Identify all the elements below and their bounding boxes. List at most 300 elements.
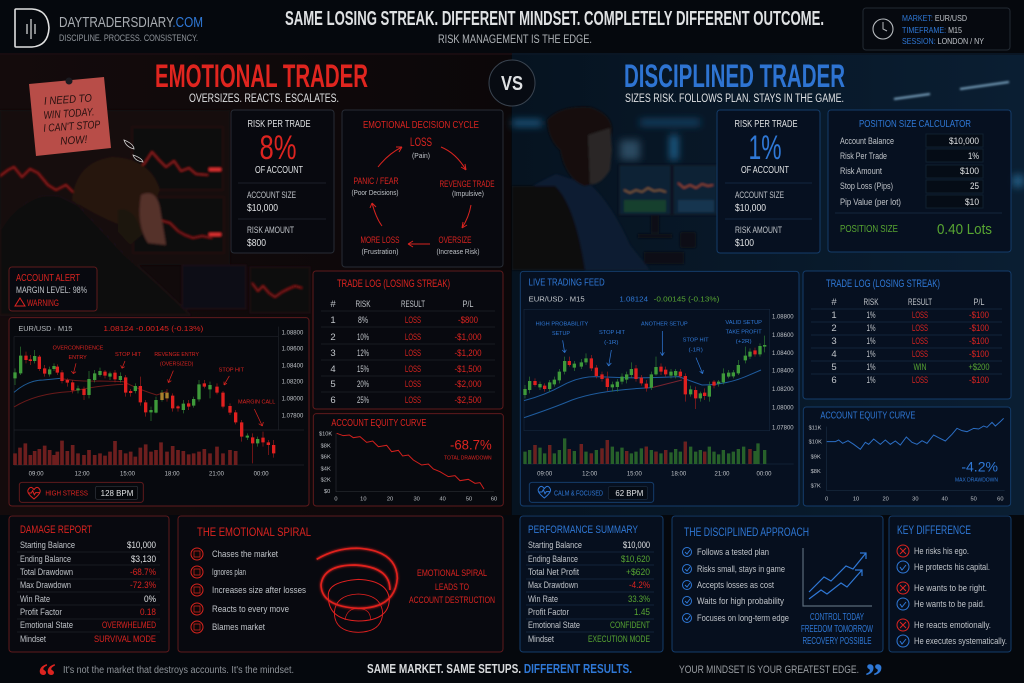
panel: the disciplined approach: Risks small, stays in game	[697, 564, 785, 575]
panel: equity curve disciplined: 20	[883, 496, 889, 502]
panel: trade log emotional: RESULT	[401, 299, 425, 310]
panel: the disciplined approach: Focuses on long-term edge	[697, 613, 789, 624]
panel: trade log disciplined: LOSS	[912, 323, 928, 334]
volume bars	[525, 438, 765, 464]
footer	[0, 655, 1024, 683]
panel: damage report: -72.3%	[130, 580, 156, 591]
panel: trade log emotional: -$2,000	[454, 379, 482, 390]
panel: trade log disciplined: LOSS	[912, 336, 928, 347]
panel: equity curve emotional: 10	[360, 497, 366, 503]
panel: the emotional spiral: Ignores plan	[212, 567, 246, 578]
panel: performance summary: PERFORMANCE SUMMARY	[528, 524, 638, 536]
panel: account alert: ACCOUNT ALERT	[16, 272, 80, 284]
center message: SAME MARKET. SAME SETUPS. DIFFERENT RESULTS.	[367, 661, 632, 676]
panel: key difference: He executes systematically.	[914, 636, 1007, 646]
panel: equity curve disciplined	[803, 407, 1011, 506]
panel: equity curve emotional: -68.7%	[450, 436, 492, 452]
panel: damage report: Ending Balance	[20, 554, 71, 564]
panel: risk per trade emotional: $10,000	[247, 202, 278, 214]
panel: live trading feed: 00:00	[757, 471, 772, 477]
panel: equity curve emotional: $10K	[319, 432, 332, 438]
logo text: DAYTRADERSDIARY.COM	[59, 14, 203, 31]
panel: live trading feed: 1.08600	[772, 333, 794, 339]
x icons	[897, 545, 909, 631]
panel: account alert: MARGIN LEVEL: 98%	[16, 285, 87, 295]
panel: position size calculator: POSITION SIZE CALCULATOR	[859, 118, 971, 130]
panel: trade log emotional: 6	[330, 395, 336, 406]
panel: position size calculator: POSITION SIZE	[840, 224, 898, 235]
annotation labels: (OVERSIZED)	[160, 361, 193, 367]
panel: trade log emotional: LOSS	[405, 395, 421, 406]
panel: the emotional spiral: ACCOUNT DESTRUCTION	[409, 595, 495, 606]
calm badge	[529, 482, 654, 502]
panel: live trading feed: 15:00	[627, 471, 642, 477]
panel: damage report: Starting Balance	[20, 540, 75, 550]
panel: trade log disciplined: +$200	[968, 362, 990, 373]
panel: key difference: KEY DIFFERENCE	[897, 523, 971, 537]
heading: disciplined trader	[624, 58, 845, 105]
panel: damage report: $3,130	[131, 554, 156, 565]
panel: trade log disciplined: LOSS	[912, 375, 928, 386]
panel: equity curve emotional: $8K	[321, 443, 331, 449]
panel: risk per trade emotional	[231, 110, 334, 253]
panel: trade log emotional: P/L	[462, 299, 474, 310]
panel: equity curve emotional: $0	[324, 489, 330, 495]
panel: key difference: He risks his ego.	[914, 546, 969, 556]
panel: position size calculator: Account Balance	[840, 136, 894, 146]
icon: heart	[538, 486, 551, 498]
panel: trade log disciplined: LOSS	[912, 349, 928, 360]
panel: trade log disciplined: 1%	[866, 336, 876, 347]
panel: key difference: He protects his capital.	[914, 562, 990, 572]
panel: disciplined backdrop photo	[512, 55, 1024, 515]
panel: position size calculator: Stop Loss (Pips)	[840, 181, 893, 191]
panel: emotional price chart: 1.08600	[282, 347, 304, 353]
icon: heart	[28, 487, 40, 499]
panel: the emotional spiral: LEADS TO	[435, 582, 469, 593]
candles	[15, 347, 258, 447]
panel: the emotional spiral: THE EMOTIONAL SPIRAL	[197, 525, 311, 539]
panel: equity curve disciplined: $8K	[811, 469, 821, 475]
panel: trade log disciplined	[803, 271, 1011, 399]
panel: equity curve disciplined: 40	[942, 496, 948, 502]
panel: emotional decision cycle	[342, 110, 503, 267]
panel: equity curve emotional: $2K	[321, 478, 331, 484]
panel: trade log disciplined: 1%	[866, 362, 876, 373]
panel: damage report: Profit Factor	[20, 607, 62, 617]
header bar	[0, 0, 1024, 54]
panel: the disciplined approach: CONTROL TODAY	[810, 612, 864, 623]
logo icon	[15, 9, 49, 47]
panel: emotional price chart: 15:00	[120, 472, 136, 478]
panel: trade log emotional: 8%	[358, 315, 368, 326]
panel: equity curve disciplined: $7K	[811, 483, 821, 489]
panel: trade log disciplined: 6	[831, 375, 837, 386]
panel: performance summary: $10,000	[623, 540, 650, 551]
panel: trade log emotional: LOSS	[405, 332, 421, 343]
panel: trade log disciplined: -$100	[969, 349, 989, 360]
panel: trade log disciplined: 1%	[866, 310, 876, 321]
panel: risk per trade disciplined: RISK PER TRADE	[734, 119, 798, 130]
panel: trade log emotional: 20%	[357, 379, 369, 390]
panel: emotional decision cycle: EMOTIONAL DECISION CYCLE	[363, 119, 479, 131]
sticky note	[29, 77, 111, 156]
panel: equity curve disciplined: 60	[997, 496, 1003, 502]
panel: trade log emotional: 15%	[357, 364, 369, 375]
panel: the disciplined approach: Accepts losses as cost	[697, 580, 774, 591]
panel: position size calculator: $100	[960, 166, 979, 177]
panel: emotional decision cycle: LOSS	[410, 137, 432, 149]
panel: the disciplined approach	[672, 516, 883, 652]
panel: emotional decision cycle: (Frustration)	[362, 247, 399, 256]
panel: emotional price chart: 1.08800	[282, 330, 304, 336]
panel: trade log disciplined: LOSS	[912, 310, 928, 321]
panel: risk per trade emotional: ACCOUNT SIZE	[247, 190, 296, 201]
panel: trade log emotional: 25%	[357, 395, 369, 406]
heading: disciplined trader: DISCIPLINED TRADER	[624, 58, 845, 94]
panel: trade log emotional: 12%	[357, 348, 369, 359]
panel: risk per trade emotional: OF ACCOUNT	[255, 165, 303, 176]
panel: emotional price chart: 1.08124 -0.00145 (-0.13%)	[103, 324, 204, 333]
panel: emotional decision cycle: (Impulsive)	[452, 189, 484, 198]
panel: equity curve disciplined: ACCOUNT EQUITY CURVE	[820, 411, 916, 422]
panel: emotional decision cycle: MORE LOSS	[360, 235, 400, 246]
panel: equity curve emotional: $6K	[321, 455, 331, 461]
panel: damage report: Max Drawdown	[20, 580, 71, 590]
panel: performance summary	[520, 516, 663, 652]
panel: the emotional spiral	[178, 516, 503, 652]
panel: performance summary: -4.2%	[629, 580, 650, 591]
panel: emotional price chart: 1.08000	[282, 397, 304, 403]
panel: trade log emotional	[313, 271, 503, 409]
panel: equity curve emotional: 50	[466, 497, 472, 503]
panel: equity curve disciplined: 0	[825, 496, 828, 502]
panel: the disciplined approach: RECOVERY POSSIBLE	[802, 636, 872, 647]
panel: trade log disciplined: 4	[831, 349, 837, 360]
heading: disciplined trader: SIZES RISK. FOLLOWS PLAN. STAYS IN THE GAME.	[625, 93, 844, 105]
panel: trade log disciplined: -$100	[969, 323, 989, 334]
panel: position size calculator: 1%	[968, 151, 979, 162]
panel: risk per trade emotional: $800	[247, 237, 266, 249]
panel: key difference	[889, 516, 1011, 652]
panel: live trading feed: 12:00	[582, 471, 598, 477]
panel: trade log emotional: LOSS	[405, 379, 421, 390]
panel: emotional price chart: 21:00	[209, 472, 225, 478]
panel: trade log emotional: 3	[330, 348, 336, 359]
panel: trade log emotional: -$2,500	[454, 395, 482, 406]
panel: live trading feed: LIVE TRADING FEED	[529, 278, 605, 289]
panel: trade log emotional: 2	[330, 332, 336, 343]
cycle arrows	[370, 147, 471, 247]
annotation labels: OVERCONFIDENCE	[53, 345, 104, 351]
panel: equity curve disciplined: 30	[912, 496, 918, 502]
heading: emotional trader: OVERSIZES. REACTS. ESCALATES.	[189, 93, 339, 105]
panel: risk per trade disciplined: OF ACCOUNT	[741, 165, 789, 176]
panel: emotional decision cycle: REVENGE TRADE	[440, 179, 494, 190]
quote right: YOUR MINDSET IS YOUR GREATEST EDGE.	[679, 664, 859, 676]
panel: emotional price chart: 00:00	[254, 472, 269, 478]
panel: trade log emotional: LOSS	[405, 364, 421, 375]
growth chart icon	[803, 548, 872, 606]
panel: key difference: He wants to be paid.	[914, 599, 985, 609]
panel: equity curve emotional: 60	[491, 497, 497, 503]
panel: trade log disciplined: 3	[831, 336, 837, 347]
panel: the emotional spiral: EMOTIONAL SPIRAL	[417, 568, 487, 579]
panel: live trading feed: 1.07800	[772, 425, 794, 431]
panel: damage report: DAMAGE REPORT	[20, 524, 92, 536]
sticky note: I CAN'T STOP	[43, 119, 101, 135]
candles	[525, 336, 765, 402]
panel: trade log emotional: 1	[330, 315, 336, 326]
annotation labels: STOP HIT	[683, 338, 709, 344]
check icons	[682, 548, 692, 622]
panel: emotional price chart: 1.08200	[282, 380, 304, 386]
panel: emotional decision cycle: (Increase Risk)	[436, 247, 480, 256]
panel: performance summary: EXECUTION MODE	[588, 634, 650, 645]
panel: the emotional spiral: Blames market	[212, 622, 265, 633]
panel: damage report: 0%	[144, 594, 156, 605]
spiral icon list	[191, 548, 203, 633]
panel: emotional price chart: 12:00	[75, 472, 90, 478]
vs badge	[489, 60, 535, 106]
icon: warning triangle	[15, 298, 25, 306]
quote left: It's not the market that destroys accounts. It's the mindset.	[63, 665, 294, 676]
panel: emotional price chart: 18:00	[165, 472, 180, 478]
annotation labels: STOP HIT	[115, 352, 142, 358]
panel: key difference: He wants to be right.	[914, 583, 987, 593]
panel: trade log emotional: TRADE LOG (LOSING STREAK)	[337, 278, 450, 290]
panel: trade log disciplined: -$100	[969, 336, 989, 347]
panel: emotional price chart: 1.08400	[282, 363, 304, 369]
heading: emotional trader: EMOTIONAL TRADER	[155, 58, 368, 94]
panel: damage report: Total Drawdown	[20, 567, 73, 577]
annotation labels	[53, 345, 275, 405]
panel: trade log disciplined: RESULT	[908, 297, 932, 308]
panel: equity curve disciplined: $10K	[809, 440, 822, 446]
panel: live trading feed: 1.08000	[772, 406, 794, 412]
panel: live trading feed: EUR/USD · M15	[529, 295, 585, 304]
market info box: SESSION: LONDON / NY	[902, 36, 984, 46]
panel: equity curve disciplined: -4.2%	[961, 459, 998, 475]
panel: emotional backdrop photo	[0, 55, 511, 515]
panel: emotional price chart: 09:00	[29, 472, 44, 478]
annotation arrows	[562, 331, 703, 374]
market info box: TIMEFRAME: M15	[902, 25, 962, 35]
panel: performance summary: Emotional State	[528, 620, 580, 630]
annotation labels: ENTRY	[68, 355, 87, 361]
panel: the disciplined approach: FREEDOM TOMORROW	[801, 624, 873, 635]
calm badge: CALM & FOCUSED	[554, 491, 603, 498]
panel: emotional price chart: 1.07800	[282, 414, 304, 420]
panel: trade log emotional: 4	[330, 364, 336, 375]
stress badge: HIGH STRESS	[45, 489, 88, 498]
panel: risk per trade disciplined	[717, 110, 820, 253]
annotation labels: SETUP	[552, 331, 570, 337]
annotation labels: TAKE PROFIT	[726, 329, 762, 335]
panel: live trading feed: 1.08400	[772, 369, 794, 375]
panel: trade log disciplined: RISK	[864, 297, 879, 308]
panel: performance summary: Starting Balance	[528, 540, 582, 550]
panel: trade log disciplined: 1%	[866, 375, 876, 386]
panel: damage report: Mindset	[20, 634, 46, 644]
panel: trade log disciplined: #	[831, 297, 837, 308]
panel: live trading feed: 1.08124	[619, 295, 649, 304]
panel: risk per trade disciplined: RISK AMOUNT	[735, 225, 782, 236]
panel: emotional decision cycle: OVERSIZE	[438, 235, 472, 246]
panel: emotional price chart	[9, 318, 309, 506]
panel: damage report: -68.7%	[130, 567, 156, 578]
icon: clock	[873, 19, 893, 39]
moving averages	[14, 378, 167, 407]
panel: position size calculator: Pip Value (per lot)	[840, 197, 901, 207]
panel: position size calculator	[828, 110, 1011, 252]
panel: equity curve emotional: TOTAL DRAWDOWN	[444, 455, 492, 461]
panel: performance summary: CONFIDENT	[610, 620, 650, 631]
panel: damage report: OVERWHELMED	[102, 620, 156, 631]
market info box: MARKET: EUR/USD	[902, 13, 967, 23]
panel: damage report	[9, 516, 169, 652]
heading: emotional trader	[155, 58, 368, 105]
panel: risk per trade emotional: RISK PER TRADE	[248, 119, 311, 130]
panel: trade log emotional: -$1,500	[454, 364, 482, 375]
annotation labels: VALID SETUP	[725, 320, 762, 326]
stress badge	[19, 482, 143, 502]
panel: live trading feed: 1.08800	[772, 315, 794, 321]
sticky note: I NEED TO	[44, 92, 93, 108]
calm badge: 62 BPM	[615, 488, 643, 498]
panel: performance summary: Ending Balance	[528, 554, 578, 564]
panel: trade log disciplined: -$100	[969, 375, 989, 386]
panel: position size calculator: $10,000	[949, 136, 979, 147]
panel: trade log emotional: -$800	[458, 315, 478, 326]
panel: emotional decision cycle: (Poor Decisions)	[352, 188, 399, 197]
annotation labels: ANOTHER SETUP	[641, 322, 688, 328]
panel: trade log disciplined: 1%	[866, 349, 876, 360]
panel: live trading feed: 1.08200	[772, 387, 794, 393]
panel: performance summary: +$620	[626, 567, 650, 578]
market info box	[863, 8, 1010, 50]
panel: trade log emotional: -$1,200	[454, 348, 482, 359]
panel: live trading feed	[520, 271, 799, 506]
panel: live trading feed: -0.00145 (-0.13%)	[654, 295, 720, 304]
panel: live trading feed: 21:00	[715, 471, 730, 477]
panel: risk per trade emotional: 8%	[260, 129, 296, 167]
volume bars	[15, 441, 236, 465]
panel: the disciplined approach: Waits for high probability	[697, 596, 784, 607]
panel: position size calculator: Risk Amount	[840, 166, 882, 176]
panel: the emotional spiral: Increases size after losses	[212, 585, 306, 596]
panel: trade log disciplined: 5	[831, 362, 837, 373]
annotation labels: (+2R)	[736, 339, 752, 345]
panel: the disciplined approach: Follows a tested plan	[697, 547, 769, 558]
panel: trade log disciplined: -$100	[969, 310, 989, 321]
vs badge: VS	[501, 73, 523, 95]
panel: performance summary: $10,620	[621, 554, 650, 565]
panel: live trading feed: 18:00	[671, 471, 687, 477]
annotation arrows	[71, 361, 263, 426]
panel: position size calculator: $10	[965, 197, 979, 208]
panel: the disciplined approach: THE DISCIPLINED APPROACH	[684, 525, 809, 539]
panel: account alert	[9, 267, 97, 311]
panel: performance summary: Max Drawdown	[528, 580, 578, 590]
annotation labels: STOP HIT	[219, 367, 245, 373]
panel: performance summary: 33.3%	[628, 594, 650, 605]
panel: trade log emotional: LOSS	[405, 348, 421, 359]
annotation labels: STOP HIT	[599, 330, 626, 336]
panel: trade log disciplined: P/L	[974, 297, 984, 308]
panel: equity curve emotional: ACCOUNT EQUITY CURVE	[331, 418, 427, 429]
panel: account alert: WARNING	[27, 298, 59, 308]
panel: trade log emotional: #	[330, 299, 336, 310]
panel: damage report: Win Rate	[20, 594, 50, 604]
panel: trade log disciplined: 1%	[866, 323, 876, 334]
panel: trade log emotional: -$1,000	[454, 332, 482, 343]
panel: position size calculator: Risk Per Trade	[840, 151, 887, 161]
panel: trade log emotional: 10%	[357, 332, 369, 343]
panel: equity curve emotional: 30	[414, 497, 420, 503]
panel: live trading feed: 1.08400	[772, 351, 794, 357]
panel: risk per trade disciplined: 1%	[748, 129, 782, 167]
panel: equity curve disciplined: 10	[853, 496, 859, 502]
panel: risk per trade disciplined: ACCOUNT SIZE	[735, 190, 784, 201]
panel: the emotional spiral: Chases the market	[212, 549, 278, 560]
panel: equity curve emotional: $4K	[321, 466, 331, 472]
panel: emotional price chart: EUR/USD · M15	[18, 324, 72, 333]
annotation labels: (-1R)	[688, 348, 703, 354]
panel: performance summary: 1.45	[634, 607, 650, 618]
panel: trade log disciplined: WIN	[914, 362, 927, 373]
sticky note: WIN TODAY.	[43, 106, 95, 122]
panel: live trading feed: 09:00	[537, 471, 553, 477]
stress badge: 128 BPM	[101, 488, 133, 498]
panel: equity curve emotional: 40	[440, 497, 446, 503]
annotation labels	[536, 320, 762, 354]
panel: equity curve emotional: 0	[334, 497, 338, 503]
annotation labels: (-1R)	[604, 340, 619, 346]
panel: trade log emotional: LOSS	[405, 315, 421, 326]
annotation labels: MARGIN CALL	[238, 399, 275, 405]
check icons	[897, 561, 909, 647]
panel: equity curve emotional: 20	[387, 497, 393, 503]
panel: key difference: He reacts emotionally.	[914, 620, 991, 630]
panel: trade log emotional: 5	[330, 379, 336, 390]
sub title: RISK MANAGEMENT IS THE EDGE.	[438, 32, 592, 46]
panel: damage report: SURVIVAL MODE	[94, 634, 156, 645]
annotation labels: REVENGE ENTRY	[154, 352, 199, 358]
panel: position size calculator: 0.40 Lots	[937, 221, 992, 238]
panel: risk per trade disciplined: $10,000	[735, 202, 766, 214]
spiral graphic	[317, 548, 397, 632]
moving averages	[524, 370, 761, 418]
panel: performance summary: Profit Factor	[528, 607, 569, 617]
panel: damage report: 0.18	[140, 607, 156, 618]
panel: trade log emotional: RISK	[356, 299, 371, 310]
panel: performance summary: Total Net Profit	[528, 567, 579, 577]
panel: damage report: Emotional State	[20, 620, 73, 630]
panel: equity curve disciplined: 50	[971, 496, 977, 502]
panel: equity curve disciplined: MAX DRAWDOWN	[955, 478, 998, 484]
panel: emotional decision cycle: (Pain)	[412, 151, 430, 160]
logo text	[59, 14, 203, 43]
panel: the emotional spiral: Reacts to every move	[212, 604, 289, 615]
sticky note: NOW!	[60, 134, 88, 148]
panel: performance summary: Mindset	[528, 634, 554, 644]
panel: equity curve disciplined: $11K	[809, 425, 822, 431]
panel: risk per trade emotional: RISK AMOUNT	[247, 225, 294, 236]
panel: trade log disciplined: 1	[831, 310, 837, 321]
panel: trade log disciplined: TRADE LOG (LOSING STREAK)	[826, 278, 940, 290]
panel: damage report: $10,000	[127, 540, 156, 551]
